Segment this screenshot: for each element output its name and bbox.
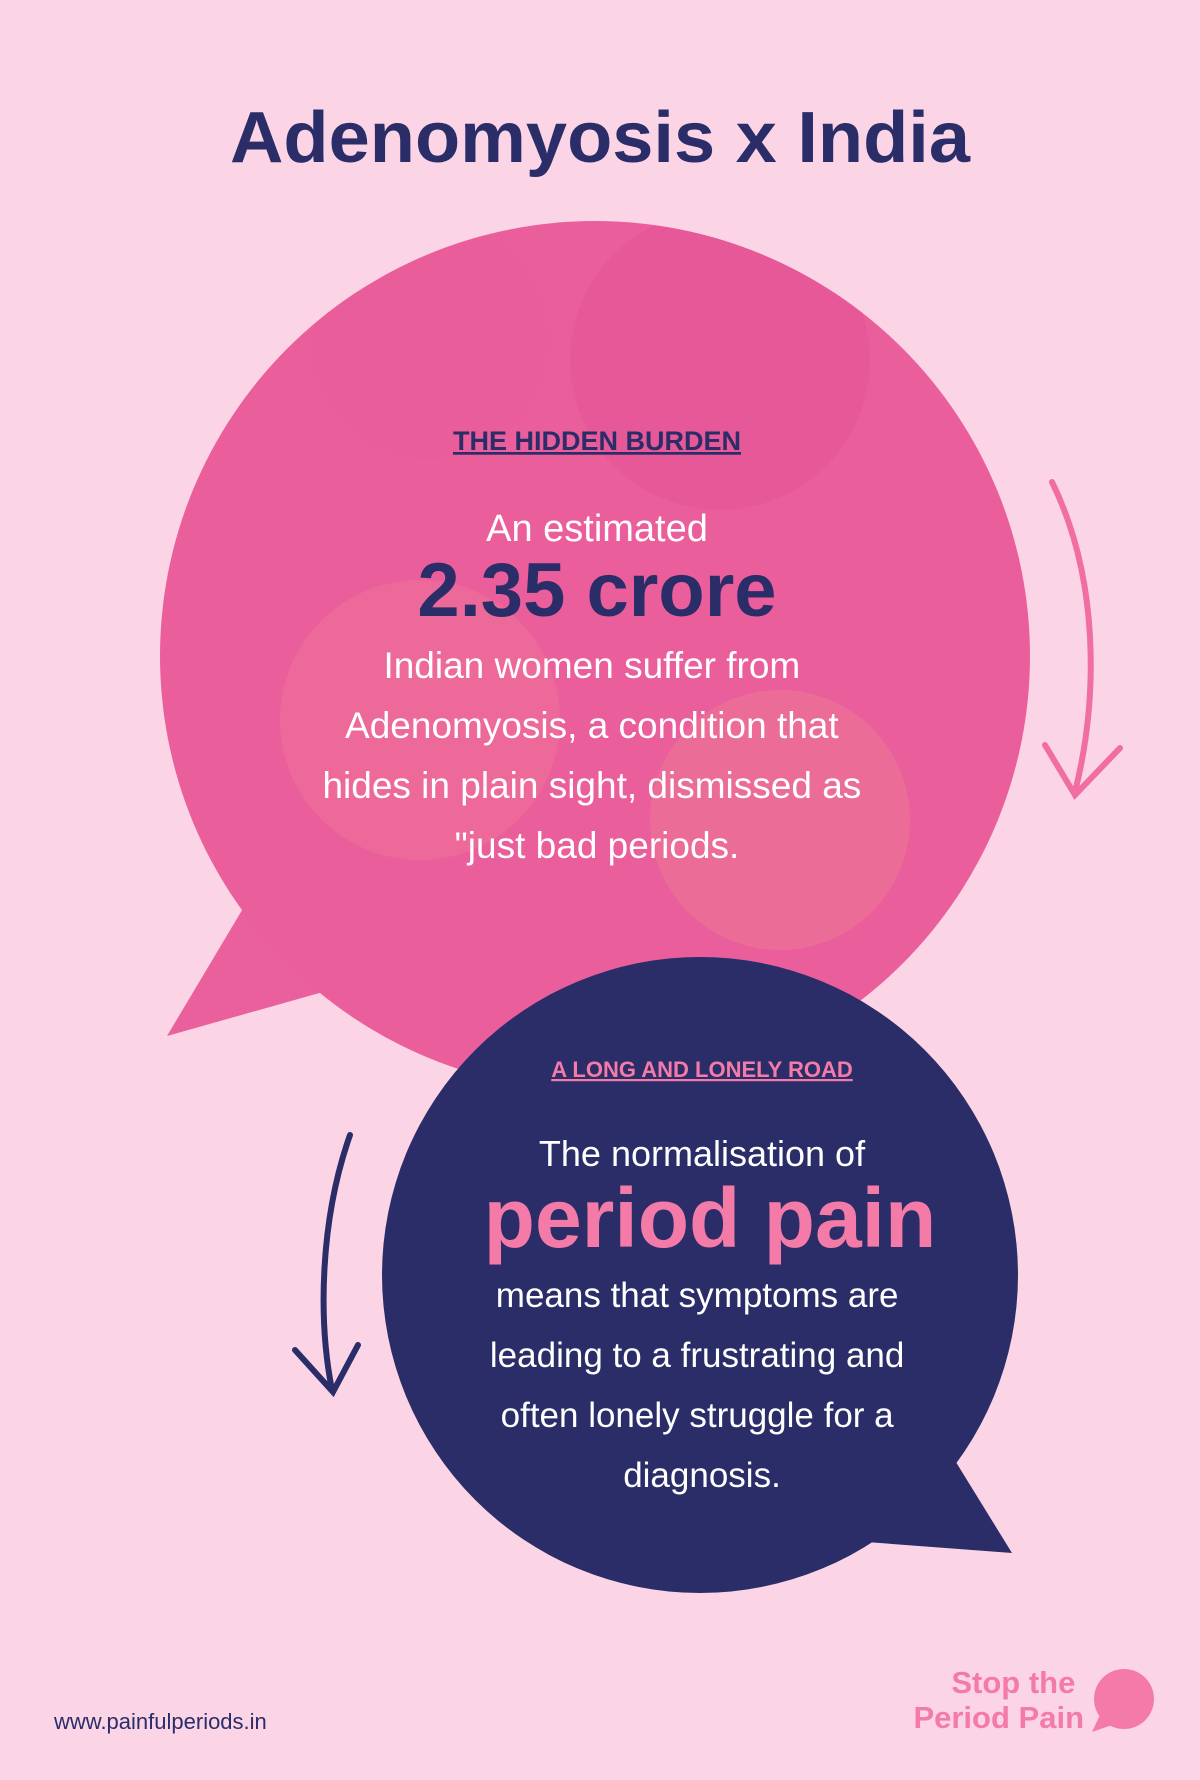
text block: description: hides in plain sight, dismissed as [322,765,861,806]
highlight: period pain: period pain [484,1171,936,1265]
panel: long and lonely road bubble [382,957,1018,1593]
arrow: navy [295,1135,358,1392]
text block: symptoms: diagnosis. [623,1456,781,1495]
title: Adenomyosis x India [230,98,971,178]
logo: stop the period pain: Stop the [951,1665,1075,1700]
text block: description: Adenomyosis, a condition that [345,705,839,746]
logo: stop the period pain: Period Pain [913,1700,1084,1735]
text block: description: "just bad periods. [455,825,739,866]
text block: description: Indian women suffer from [383,645,800,686]
heading: the hidden burden: THE HIDDEN BURDEN [453,426,741,456]
text block: symptoms: means that symptoms are [496,1276,898,1315]
arrow: pink [1045,482,1120,795]
logo: stop the period pain [913,1665,1154,1735]
text: an estimated: An estimated [486,508,708,550]
panel: hidden burden bubble [160,210,1030,1091]
text block: symptoms: leading to a frustrating and [490,1336,904,1375]
heading: a long and lonely road: A LONG AND LONELY ROAD [551,1057,853,1082]
text block: symptoms: often lonely struggle for a [501,1396,894,1435]
text: normalisation: The normalisation of [539,1133,866,1174]
footer: website: www.painfulperiods.in [53,1709,267,1734]
stat: 2.35 crore: 2.35 crore [417,548,777,633]
